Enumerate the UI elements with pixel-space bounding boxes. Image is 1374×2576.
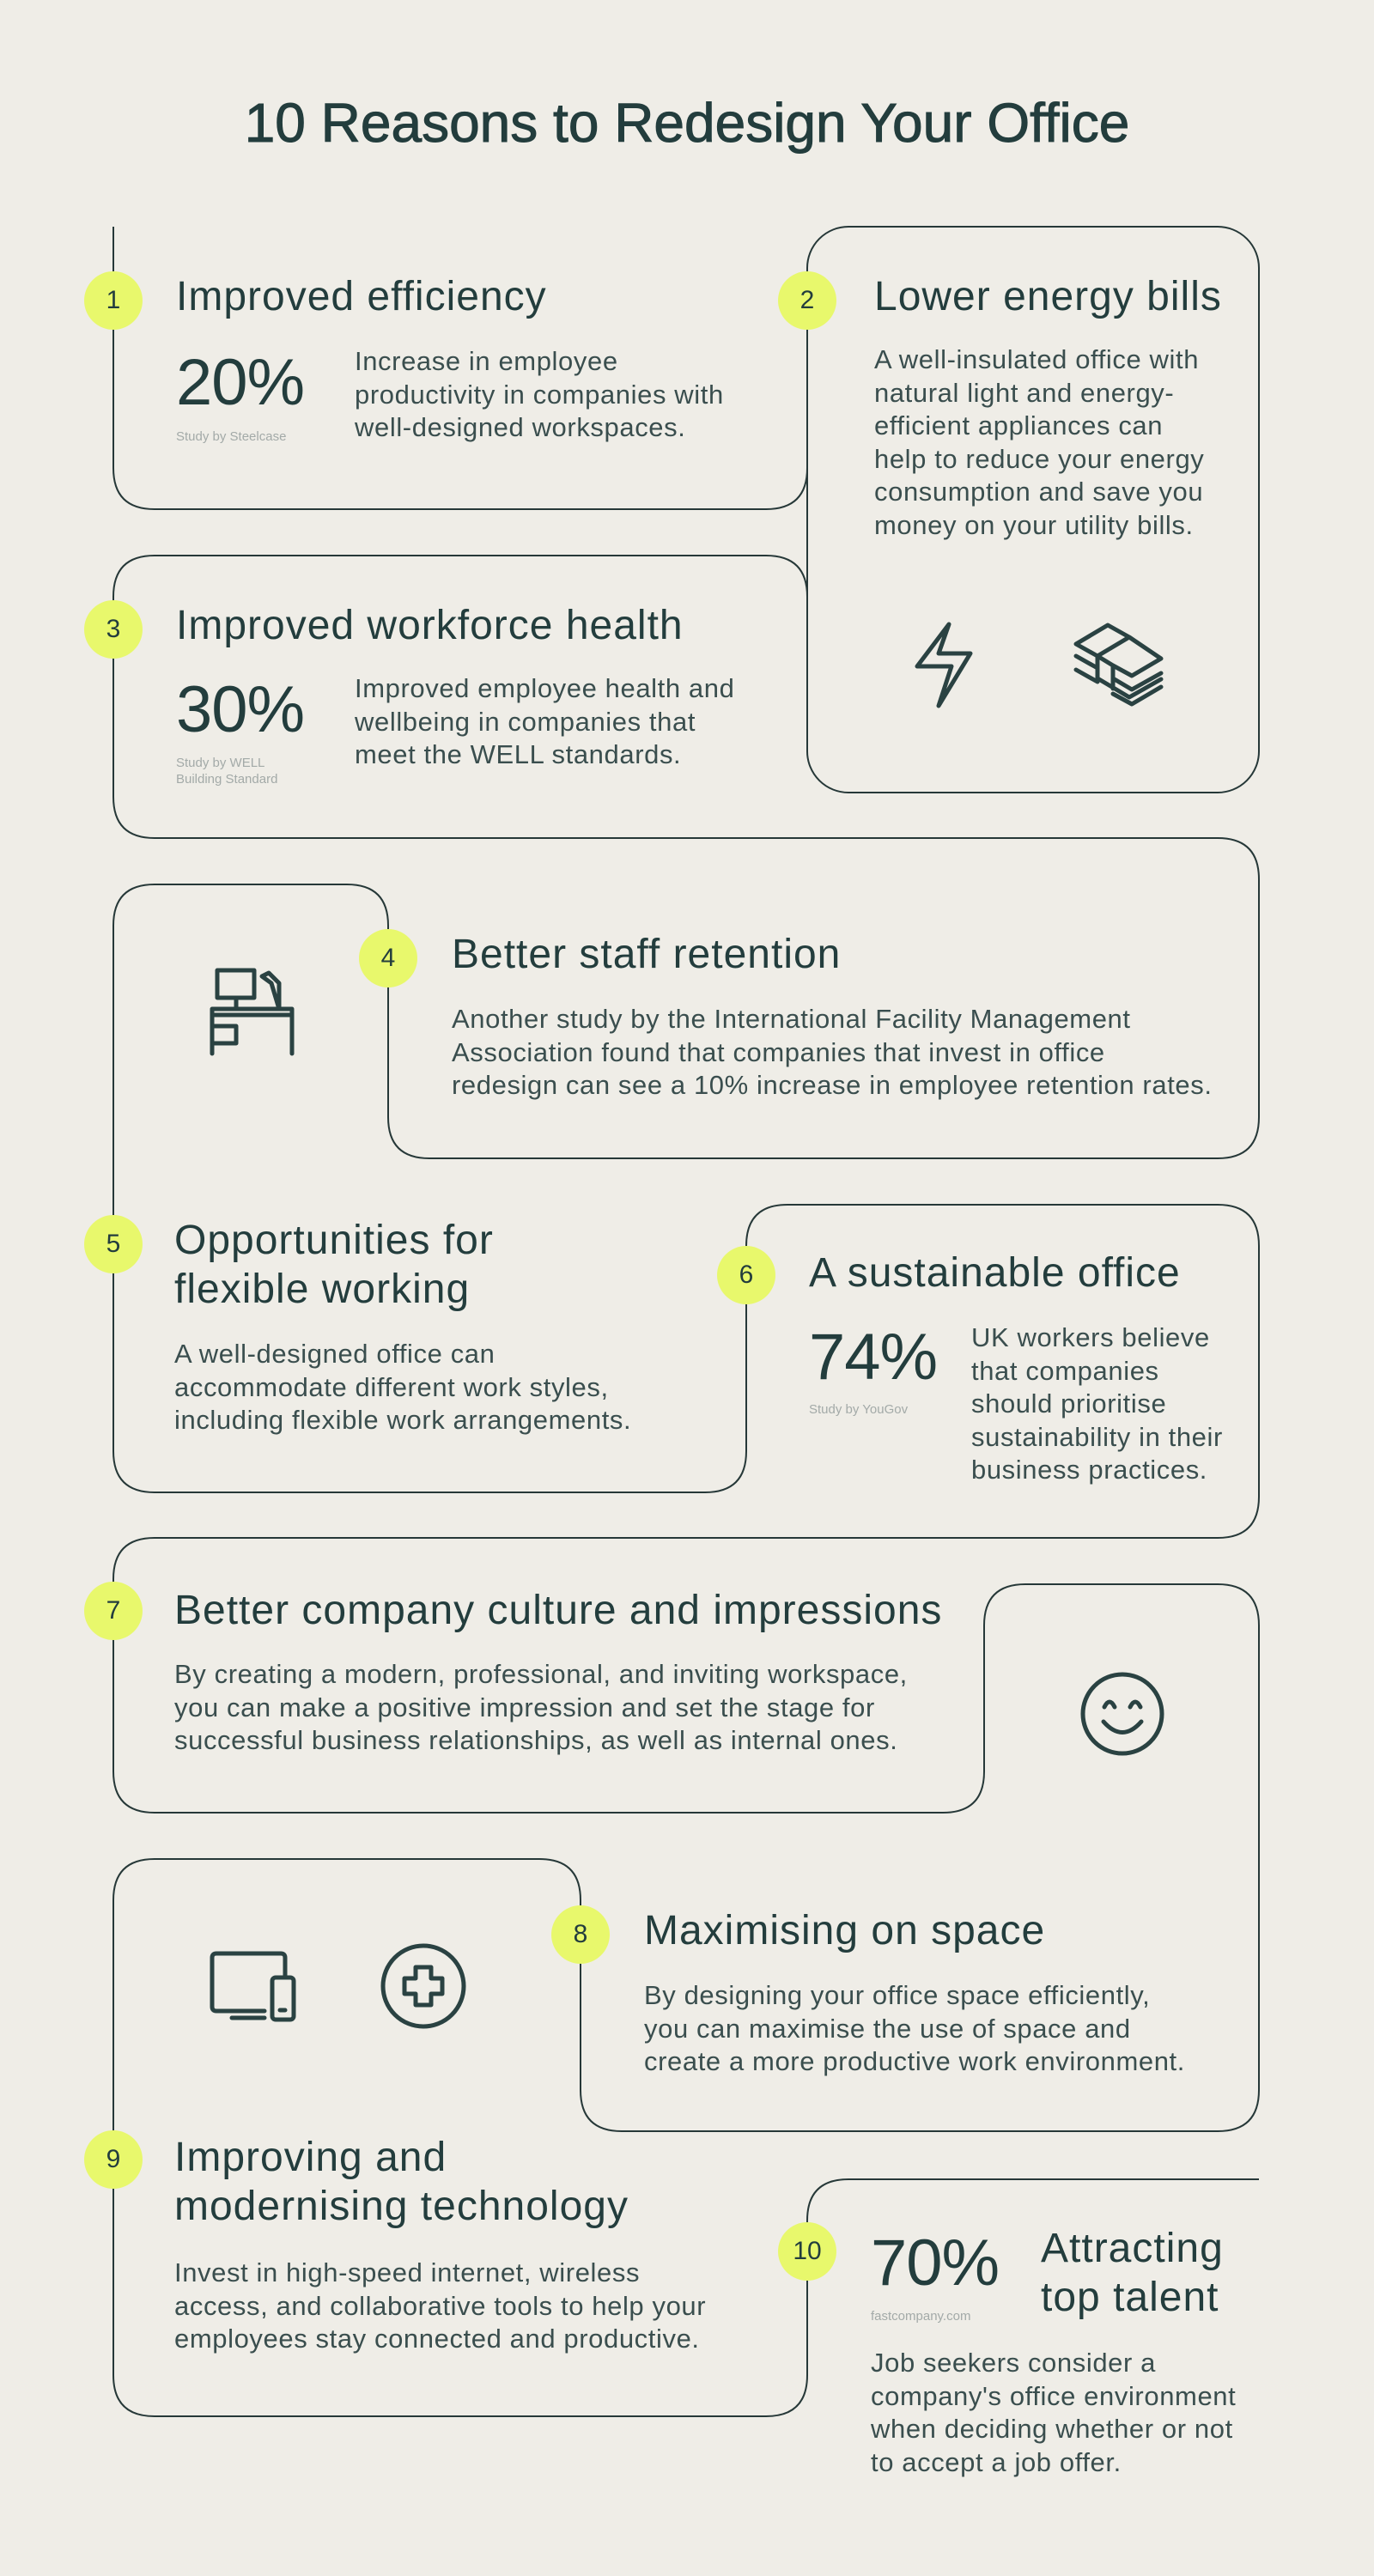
panel 3 text: Improved employee health and	[355, 673, 734, 703]
icon: lightning	[917, 624, 970, 706]
panel 2 text	[874, 274, 1222, 539]
panel 4 text	[452, 932, 1213, 1100]
panel 4 text: redesign can see a 10% increase in employee retention rates.	[452, 1070, 1213, 1100]
panel 8 text	[644, 1908, 1185, 2076]
panel outline: 9 and 10	[113, 1900, 1259, 2416]
panel 1 text: well-designed workspaces.	[355, 412, 685, 442]
panel 8 text: you can maximise the use of space and	[644, 2013, 1131, 2044]
panel 2 text: help to reduce your energy	[874, 443, 1204, 474]
panel 7 text: By creating a modern, professional, and inviting workspace,	[174, 1659, 908, 1689]
panel 3 text: 30%	[176, 673, 304, 746]
panel 10 text: when deciding whether or not	[871, 2414, 1233, 2444]
panel outline: 1	[113, 227, 807, 509]
panel 10 text: Attracting	[1041, 2226, 1224, 2271]
panel 6 text: sustainability in their	[971, 1422, 1223, 1451]
panel 1 text: Improved efficiency	[176, 274, 547, 319]
panel 2 text: A well-insulated office with	[874, 344, 1199, 374]
panel 7 text: successful business relationships, as well as internal ones.	[174, 1725, 897, 1755]
panel 1 text	[176, 274, 724, 444]
panel 10 text: Job seekers consider a	[871, 2348, 1156, 2378]
panel 1 text: 20%	[176, 346, 304, 419]
panel 9 text	[174, 2135, 706, 2354]
panel 3 text: meet the WELL standards.	[355, 739, 681, 769]
text: 5	[106, 1230, 120, 1258]
panel 5 text: A well-designed office can	[174, 1339, 495, 1369]
text: 6	[739, 1261, 753, 1289]
panel 6 text: A sustainable office	[809, 1250, 1181, 1296]
text: 7	[106, 1596, 120, 1625]
panel 2 text: consumption and save you	[874, 477, 1203, 507]
panel 6 text: UK workers believe	[971, 1322, 1210, 1352]
panel 10 text: 70%	[871, 2227, 999, 2300]
panel 6 text: that companies	[971, 1355, 1159, 1386]
panel 5 text	[174, 1218, 631, 1435]
panel outline: 2	[807, 227, 1259, 793]
panel 2 text: money on your utility bills.	[874, 510, 1194, 539]
text: 4	[381, 944, 395, 972]
panel 5 text: Opportunities for	[174, 1218, 494, 1263]
panel 8 text: Maximising on space	[644, 1908, 1045, 1953]
title: 10 Reasons to Redesign Your Office	[245, 92, 1129, 154]
panel 4 text: Another study by the International Facility Management	[452, 1004, 1131, 1034]
panel outline: 7 and 8	[113, 1579, 1259, 2131]
panel 3 text: Improved workforce health	[176, 603, 684, 648]
panel 2 text: Lower energy bills	[874, 274, 1222, 319]
text: 9	[106, 2145, 120, 2173]
icon: plus circle	[383, 1946, 464, 2026]
panel 4 text: Better staff retention	[452, 932, 841, 977]
panel 10 text: fastcompany.com	[871, 2309, 970, 2324]
text: 2	[800, 286, 814, 314]
panel 10 text: company's office environment	[871, 2380, 1236, 2411]
panel 9 text: Improving and	[174, 2135, 447, 2180]
panel 3 text: Study by WELL	[176, 756, 264, 770]
panel 10 text	[871, 2226, 1236, 2476]
panel 3 text: wellbeing in companies that	[355, 706, 696, 737]
panel 10 text: top talent	[1041, 2275, 1219, 2320]
panel 1 text: Increase in employee	[355, 346, 618, 376]
panel 3 text	[176, 603, 734, 787]
panel 8 text: By designing your office space efficiently,	[644, 1980, 1150, 2010]
panel 6 text: should prioritise	[971, 1388, 1166, 1419]
icon: smiley	[1083, 1674, 1162, 1753]
icon: money stack	[1076, 625, 1161, 704]
panel 6 text: Study by YouGov	[809, 1402, 908, 1417]
panel 10 text: to accept a job offer.	[871, 2447, 1122, 2476]
panel 4 text: Association found that companies that invest in office	[452, 1037, 1105, 1066]
panel outline: 3 and 4	[113, 556, 1259, 1451]
panel 9 text: modernising technology	[174, 2184, 629, 2229]
panel 1 text: productivity in companies with	[355, 380, 724, 409]
panel 7 text: you can make a positive impression and set the stage for	[174, 1692, 875, 1722]
panel 9 text: access, and collaborative tools to help your	[174, 2291, 706, 2320]
panel outline: 5 and 6	[113, 1205, 1259, 1579]
icon: devices	[212, 1953, 294, 2020]
panel 2 text: natural light and energy-	[874, 378, 1174, 407]
text: 8	[574, 1920, 587, 1948]
panel 6 text: 74%	[809, 1321, 937, 1394]
panel 5 text: flexible working	[174, 1267, 470, 1312]
panel 1 text: Study by Steelcase	[176, 429, 286, 444]
text: 10	[793, 2237, 822, 2265]
panel 5 text: accommodate different work styles,	[174, 1372, 609, 1401]
icon: desk	[212, 970, 292, 1054]
panel 2 text: efficient appliances can	[874, 410, 1163, 440]
number badges	[84, 271, 836, 2281]
panel 9 text: Invest in high-speed internet, wireless	[174, 2257, 640, 2287]
panel 7 text	[174, 1588, 942, 1755]
panel 6 text	[809, 1250, 1223, 1485]
panel 5 text: including flexible work arrangements.	[174, 1405, 631, 1435]
panel 3 text: Building Standard	[176, 772, 277, 787]
panel 8 text: create a more productive work environment.	[644, 2046, 1185, 2076]
panel 9 text: employees stay connected and productive.	[174, 2324, 700, 2354]
text: 1	[106, 286, 120, 314]
panel 7 text: Better company culture and impressions	[174, 1588, 942, 1633]
panel 6 text: business practices.	[971, 1455, 1207, 1485]
text: 3	[106, 615, 120, 643]
